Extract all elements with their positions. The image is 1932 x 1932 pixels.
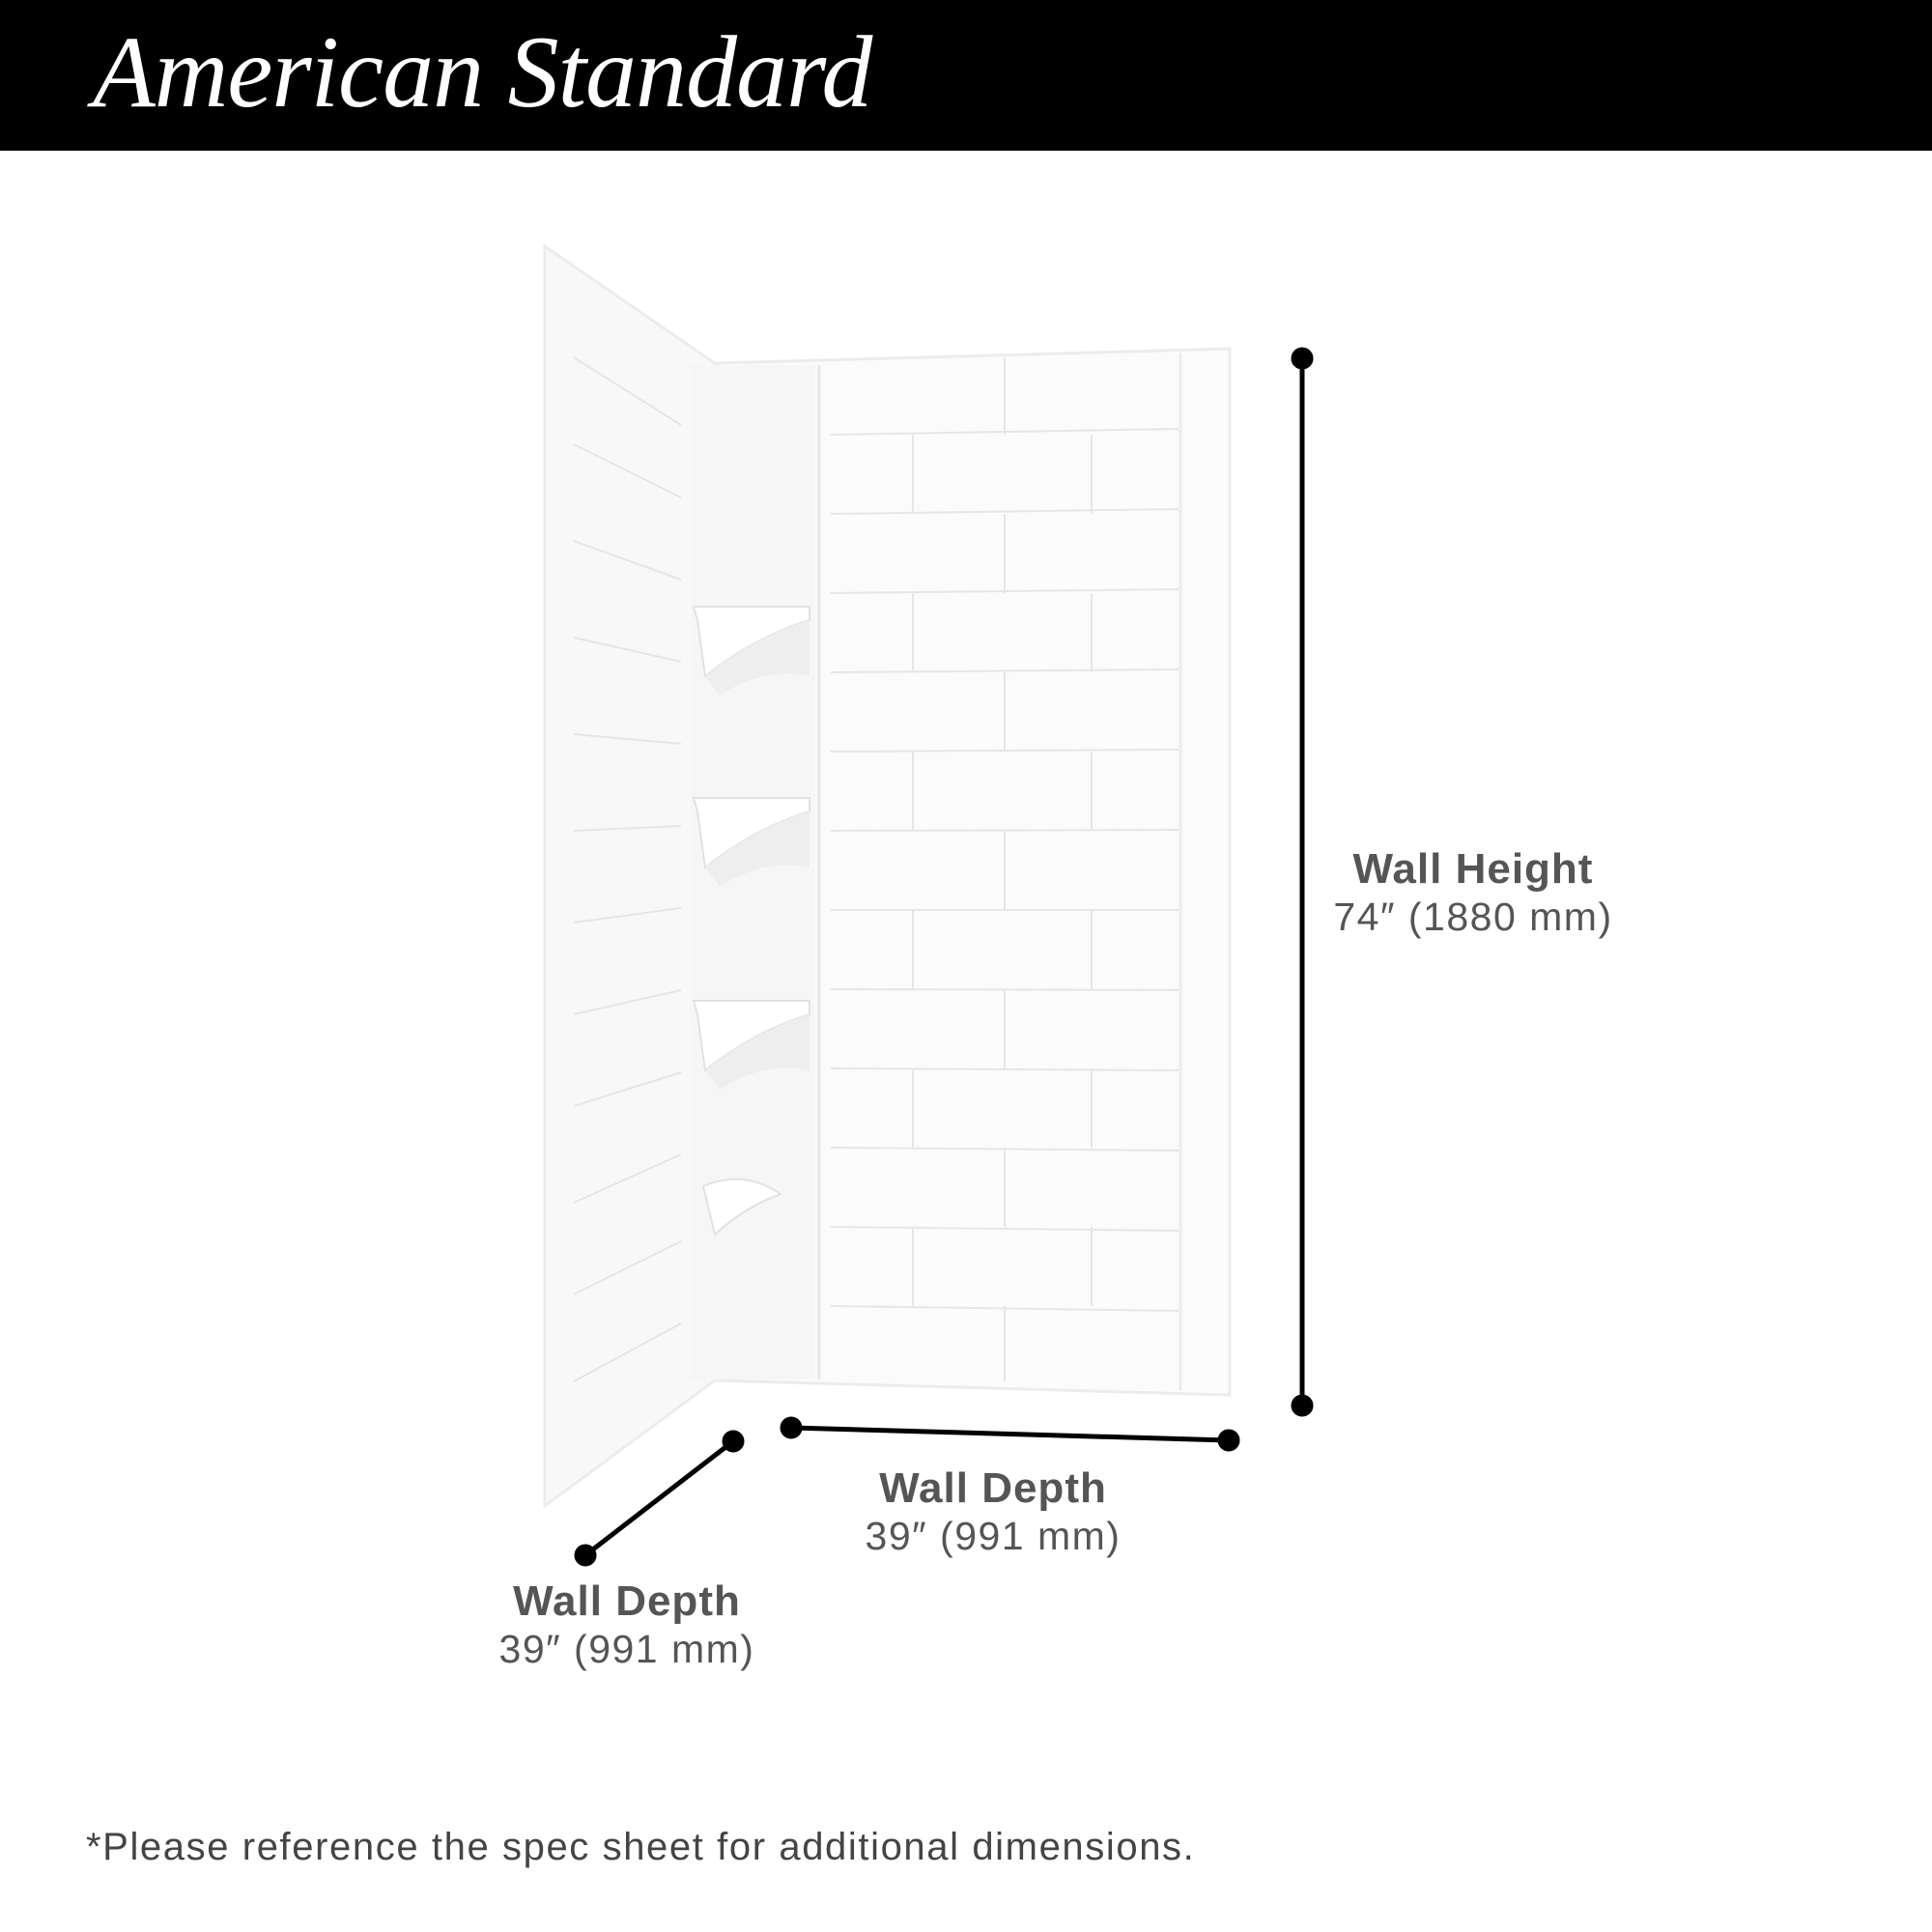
label: left wall depth: 39″ (991 mm) [499, 1627, 754, 1671]
footer note: *Please reference the spec sheet for additional dimensions. [86, 1826, 1195, 1868]
height dimension line [1293, 350, 1311, 1414]
header bar [0, 0, 1932, 151]
label: right wall depth [866, 1464, 1121, 1558]
label: left wall depth: Wall Depth [513, 1577, 741, 1625]
left wall panel [545, 246, 715, 1506]
label: wall height: 74″ (1880 mm) [1333, 895, 1613, 939]
label: right wall depth: Wall Depth [879, 1464, 1107, 1512]
label: wall height: Wall Height [1353, 845, 1593, 893]
label: left wall depth [499, 1577, 754, 1671]
left depth line [577, 1433, 742, 1564]
shelves [694, 607, 810, 1235]
shelf column [690, 365, 815, 1379]
label: wall height [1333, 845, 1613, 939]
right depth line [782, 1419, 1237, 1449]
logo: American Standard [93, 15, 871, 128]
tiles [831, 357, 1179, 1381]
back wall panel [715, 349, 1230, 1395]
label: right wall depth: 39″ (991 mm) [866, 1514, 1121, 1558]
